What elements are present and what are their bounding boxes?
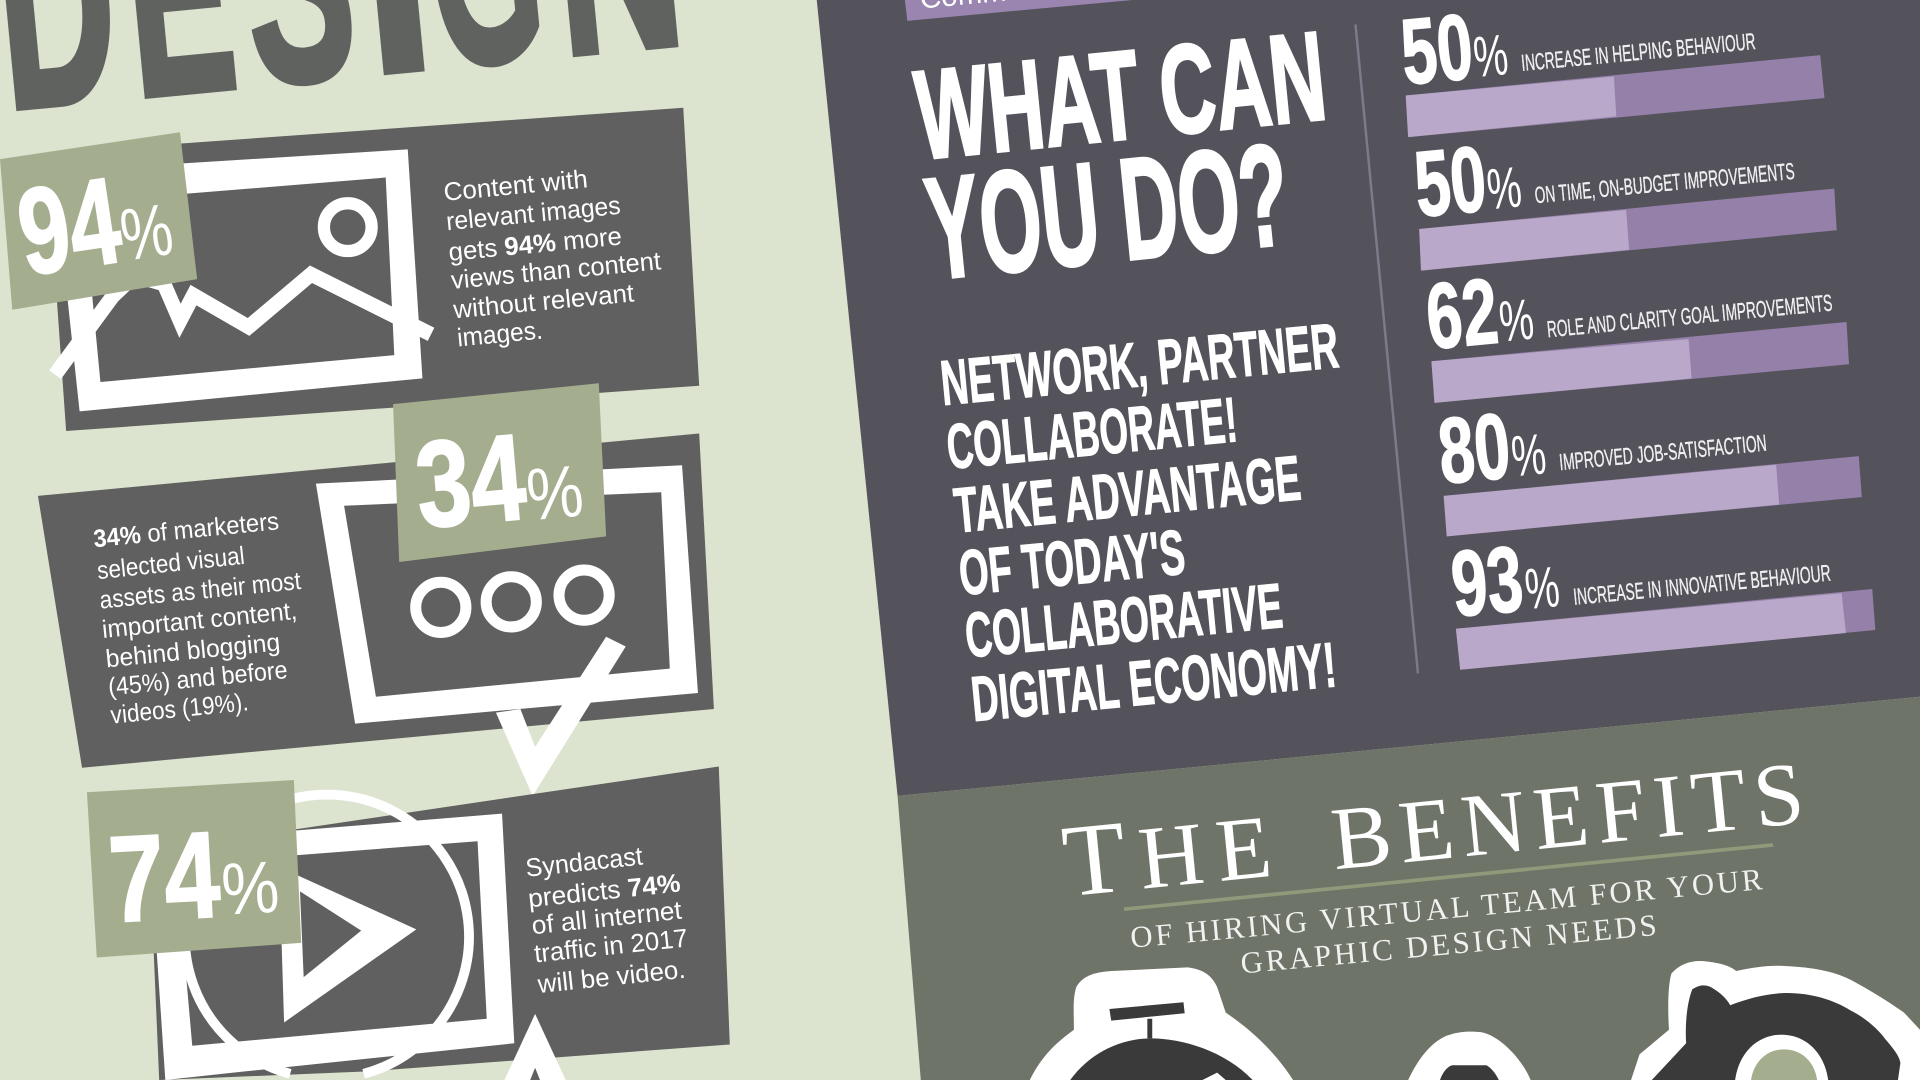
subheading: hiring virtual team: OF HIRING VIRTUAL TEAM FOR YOUR — [1129, 862, 1764, 955]
text: network partner collaborate: DIGITAL ECONOMY! — [968, 629, 1339, 735]
bar: 62% role and clarity: 62 — [1422, 259, 1502, 369]
bar: 62% role and clarity: % — [1496, 288, 1537, 355]
text: visual assets description: important content, — [101, 597, 298, 644]
text: network partner collaborate: COLLABORATIVE — [962, 570, 1286, 671]
text: relevant images description: Content with — [442, 165, 589, 207]
badge: 94%: % — [115, 187, 178, 277]
text: visual assets description: assets as their most — [98, 567, 302, 615]
bar: 80% job satisfaction: % — [1509, 422, 1549, 489]
text: relevant images description: views than content — [450, 247, 662, 295]
heading: the benefits — [1057, 744, 1808, 919]
badge: 94%: 94 — [9, 151, 129, 301]
icon: gear with green circle — [1631, 961, 1920, 1080]
text: visual assets description: selected visual — [96, 542, 246, 585]
text: network partner collaborate: COLLABORATE! — [944, 384, 1240, 483]
text: relevant images description: images. — [456, 317, 544, 353]
badge: 74%: % — [219, 845, 281, 931]
badge: 34%: 34 — [410, 408, 531, 554]
text: visual assets description: (45%) and before — [107, 656, 289, 701]
badge: 34%: % — [523, 449, 586, 536]
bar: 80% job satisfaction — [1434, 393, 1862, 536]
text: video description: will be video. — [535, 956, 687, 999]
text: video description: predicts 74% — [527, 869, 682, 913]
bar: 50% on time on budget: % — [1484, 155, 1524, 222]
text: network partner collaborate — [937, 310, 1342, 735]
bar: 50% helping behaviour — [1397, 0, 1824, 137]
text: video description — [524, 843, 689, 999]
text: network partner collaborate: TAKE ADVANTAGE — [951, 443, 1304, 547]
bar: 50% helping behaviour: INCREASE IN HELPING BEHAVIOUR — [1520, 28, 1757, 76]
badge: 74%: 74 — [106, 805, 223, 948]
text: relevant images description: relevant images — [445, 192, 622, 236]
text: network partner collaborate: OF TODAY'S — [956, 517, 1188, 609]
panel: relevant images stat — [0, 108, 699, 431]
panel: video stat — [87, 767, 730, 1080]
badge: 74% — [87, 780, 301, 958]
panel: visual assets stat — [38, 383, 714, 796]
badge: 34% — [393, 383, 606, 562]
icon: video frame with play button — [149, 795, 566, 1080]
heading: what can you do — [909, 5, 1332, 310]
subheading: hiring virtual team: GRAPHIC DESIGN NEEDS — [1239, 908, 1658, 980]
text: network partner collaborate: NETWORK, PARTNER — [937, 310, 1342, 419]
bar: 80% job satisfaction: IMPROVED JOB-SATISFACTION — [1558, 430, 1768, 475]
icon: speech bubble frame — [316, 465, 698, 796]
heading: the benefits: BENEFITS — [1327, 744, 1808, 889]
text: video description: of all internet — [530, 897, 683, 940]
text: visual assets description: 34% of marketers — [92, 507, 280, 553]
chart: progress bars — [1397, 0, 1875, 670]
text: visual assets description: behind blogging — [104, 628, 281, 673]
bar: 93% innovative behaviour — [1447, 526, 1875, 670]
text: relevant images description — [442, 165, 662, 353]
banner: purple strip — [905, 0, 1133, 21]
text: video description: traffic in 2017 — [533, 924, 689, 968]
heading: DESIGN — [0, 0, 694, 170]
bar: 50% on time on budget: 50 — [1410, 126, 1491, 237]
bar: 62% role and clarity — [1422, 259, 1849, 403]
text: visual assets description: videos (19%). — [109, 688, 250, 730]
bar: 93% innovative behaviour: % — [1522, 555, 1562, 622]
icon: stopwatch — [1030, 967, 1293, 1080]
text: relevant images description: gets 94% more — [447, 223, 623, 267]
bar: 80% job satisfaction: 80 — [1434, 393, 1514, 504]
badge: 94% — [0, 132, 197, 310]
bar: 50% on time on budget — [1410, 126, 1837, 271]
heading: the benefits: THE — [1057, 785, 1276, 919]
panel: what can you do — [817, 0, 1920, 796]
panel: the benefits — [898, 697, 1920, 1080]
bar: 93% innovative behaviour: 93 — [1447, 526, 1527, 636]
bar: 50% helping behaviour: % — [1471, 23, 1511, 90]
text: visual assets description — [92, 507, 302, 730]
heading: what can you do: YOU DO? — [919, 113, 1296, 310]
icon: image frame — [54, 149, 431, 411]
text: video description: Syndacast — [524, 843, 644, 883]
icon: head silhouette — [1408, 1032, 1531, 1080]
text: relevant images description: without relevant — [451, 279, 635, 324]
